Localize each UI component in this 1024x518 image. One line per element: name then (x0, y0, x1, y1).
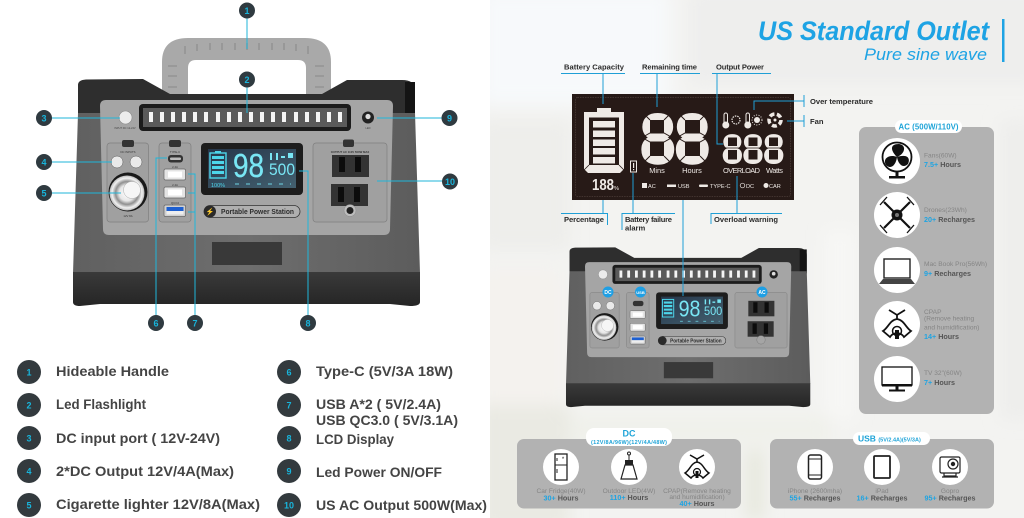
LED flashlight bar (139, 104, 351, 131)
USB pill heading (853, 432, 930, 445)
AC item: fan (874, 138, 961, 184)
DC item: car fridge (536, 449, 586, 502)
AC item: drone: 20+ Recharges (924, 215, 975, 224)
AC item: drone: Drones(23Wh) (924, 207, 967, 214)
DC output module: DC INPUTS (120, 150, 136, 154)
brand badge: ⚡ (206, 207, 214, 216)
power station front view (small) (566, 247, 810, 407)
USB item: GoPro (925, 449, 975, 502)
output mode row: CAR (769, 184, 781, 190)
legend item 10 (277, 493, 487, 517)
number marker 1 (239, 2, 255, 18)
USB item: iPad: 16+ Recharges (857, 494, 907, 502)
remaining time digits: 88 (640, 100, 710, 178)
top black shell (78, 79, 415, 116)
number marker 8 (300, 315, 316, 331)
corner shadow strip (405, 82, 415, 116)
legend item 4: 4 (26, 466, 32, 476)
legend item 7: 7 (286, 400, 292, 410)
title (758, 16, 1004, 64)
legend item 1: 1 (26, 368, 32, 378)
power station front view (large) (73, 38, 420, 306)
LCD display: 100% (211, 183, 225, 189)
number marker 2: 2 (244, 75, 250, 85)
number marker 8: 8 (305, 318, 311, 328)
AC item: laptop: Mac Book Pro(56Wh) (924, 261, 987, 268)
legend item 2: 2 (26, 400, 32, 410)
legend item 6: 6 (286, 368, 292, 378)
power station front view (small): 500 (704, 304, 723, 318)
DC item: CPAP mask (663, 449, 731, 508)
AC item: CPAP mask: 14+ Hours (924, 332, 959, 341)
port badge: AC: AC (758, 290, 766, 296)
legend item 3: 3 (26, 434, 32, 444)
DC pill heading: DC (622, 428, 636, 438)
legend item 2 (17, 393, 146, 417)
number marker 9 (442, 110, 458, 126)
port badge: USB: USB (636, 290, 645, 295)
legend item 5: 5 (26, 500, 32, 510)
USB item: iPhone: 55+ Recharges (790, 494, 840, 502)
legend item 3 (17, 426, 220, 450)
AC pill heading: AC (500W/110V) (898, 122, 959, 132)
legend item 1: Hideable Handle (56, 364, 170, 379)
AC item: CPAP mask: (Remove heating (924, 316, 975, 322)
AC item: laptop: 9+ Recharges (924, 269, 971, 278)
port badge: DC: DC (604, 290, 612, 296)
output mode row: DC (746, 184, 754, 190)
USB module: TYPE-C (170, 150, 180, 154)
number marker 10 (442, 174, 458, 190)
callout: Fan: Fan (810, 117, 824, 126)
USB item: GoPro: Gopro (941, 488, 959, 495)
output power digits: OVERLOAD (723, 166, 760, 175)
callout: Battery failure alarm (625, 215, 672, 232)
LCD diagram (572, 94, 794, 200)
legend item 6: Type-C (5V/3A 18W) (316, 364, 453, 379)
legend item 5 (17, 493, 260, 517)
rear vent (212, 242, 282, 265)
callout: Battery Capacity: Battery Capacity (564, 62, 625, 72)
number marker 7: 7 (192, 318, 198, 328)
DC output module: 12V 8A (123, 214, 133, 218)
legend item 7 (277, 393, 458, 428)
legend item 7: USB QC3.0 ( 5V/3.1A) (316, 413, 458, 428)
callout: Output Power: Output Power (716, 62, 764, 72)
port badge: DC (602, 286, 614, 298)
grey body (73, 113, 420, 273)
AC item: drone (874, 192, 975, 238)
output mode row: TYPE-C (710, 184, 731, 190)
LCD callout lines (561, 74, 804, 230)
number marker 3 (36, 110, 52, 126)
AC outlet module (313, 140, 387, 222)
legend item 4: 2*DC Output 12V/4A(Max) (56, 464, 234, 479)
LCD display (201, 143, 303, 195)
callout: Battery failure alarm: alarm (625, 224, 646, 232)
port badge: AC (756, 286, 768, 298)
AC outlet module: OUTPUT AC 110V 500W MAX (331, 150, 369, 154)
legend item 10: US AC Output 500W(Max) (316, 498, 487, 513)
USB pill heading: USB (5V/2.4A)(5V/3A) (858, 434, 921, 444)
USB item: iPad (857, 449, 907, 502)
bottom black base (73, 272, 420, 306)
battery failure icon (630, 161, 636, 172)
legend item 9: 9 (286, 466, 292, 476)
AC item: fan: Fans(60W) (924, 152, 957, 160)
callout lines (large device) (52, 17, 442, 316)
remaining time digits: Mins (649, 166, 665, 175)
DC output module (107, 140, 148, 222)
AC item: TV (874, 356, 962, 402)
output mode row: USB (678, 184, 690, 190)
callout: Remaining time: Remaining time (642, 62, 697, 72)
legend: feature list (17, 360, 487, 517)
over temperature icons (722, 113, 762, 128)
number marker 6: 6 (153, 318, 159, 328)
callout: Overload warning: Overload warning (714, 215, 778, 224)
USB item: iPhone: iPhone (2600mha) (788, 488, 842, 495)
AC item: CPAP mask (874, 301, 979, 347)
panel: USB devices (770, 432, 994, 508)
panel: AC devices (859, 120, 994, 414)
DC item: outdoor LED: 110+ Hours (610, 493, 648, 502)
number marker 9: 9 (447, 114, 452, 124)
legend item 6 (277, 360, 453, 384)
DC pill heading (586, 428, 672, 446)
LCD display: 98 (233, 147, 264, 184)
USB module: 2.4A (172, 165, 178, 169)
DC item: outdoor LED (603, 449, 655, 502)
power station front view (small): 98 (679, 295, 700, 321)
number marker 4 (36, 154, 52, 170)
legend item 4 (17, 459, 234, 483)
AC item: TV: TV 32"(60W) (924, 370, 962, 377)
remaining time digits: Hours (682, 166, 702, 175)
output power digits: Watts (766, 166, 783, 175)
legend item 10: 10 (284, 500, 294, 510)
legend item 9 (277, 459, 442, 483)
brand badge (204, 206, 300, 218)
AC item: fan: 7.5+ Hours (924, 160, 961, 169)
DC input port: INPUT DC 12-24V (114, 126, 136, 130)
AC item: CPAP mask: CPAP (924, 309, 942, 316)
number marker 7 (187, 315, 203, 331)
legend item 8: LCD Display (316, 432, 394, 447)
DC pill heading: (12V/8A/96W)(12V/4A/48W) (591, 440, 667, 446)
DC input port (114, 111, 136, 130)
background photo: right half (480, 0, 1024, 518)
legend item 7: USB A*2 ( 5V/2.4A) (316, 397, 441, 412)
line from LCD diagram to device (682, 200, 684, 296)
legend item 1 (17, 360, 170, 384)
number marker 5: 5 (41, 188, 47, 198)
output mode row: AC (648, 184, 656, 190)
USB module (159, 140, 191, 222)
front panel (100, 100, 393, 235)
battery gauge (584, 108, 624, 173)
LCD display: 500 (269, 160, 295, 179)
fan icon (769, 114, 781, 126)
number marker 4: 4 (41, 158, 47, 168)
legend item 3: DC input port ( 12V-24V) (56, 431, 220, 446)
AC item: TV: 7+ Hours (924, 378, 955, 387)
DC item: car fridge: 30+ Hours (544, 494, 578, 502)
USB module: 2.4A (172, 183, 178, 187)
legend item 5: Cigarette lighter 12V/8A(Max) (56, 497, 260, 512)
title: Pure sine wave (864, 45, 987, 64)
brand badge: Portable Power Station (221, 207, 294, 216)
callout: Over temperature: Over temperature (810, 97, 873, 106)
number marker 3: 3 (41, 114, 47, 124)
legend item 9: Led Power ON/OFF (316, 465, 442, 480)
DC item: outdoor LED: Outdoor LED(4W) (603, 488, 655, 495)
power station front view (small): Portable Power Station (670, 338, 722, 344)
LED switch: LED (365, 126, 371, 130)
number marker 10: 10 (445, 177, 455, 187)
AC item: laptop (874, 247, 987, 293)
number marker 2 (239, 72, 255, 88)
USB item: iPad: iPad (875, 488, 889, 495)
number marker 1: 1 (244, 6, 250, 16)
USB item: iPhone (788, 449, 842, 502)
AC pill heading (895, 120, 962, 133)
output mode row (642, 183, 781, 190)
USB item: GoPro: 95+ Recharges (925, 494, 975, 502)
legend item 2: Led Flashlight (56, 397, 146, 412)
DC item: car fridge: Car Fridge(40W) (536, 488, 586, 495)
handle (162, 38, 331, 95)
callout: Percentage: Percentage (564, 215, 604, 224)
DC item: CPAP mask: 40+ Hours (680, 499, 714, 508)
port badge: USB (635, 286, 646, 298)
number marker 6 (148, 315, 164, 331)
AC item: CPAP mask: and humidification) (924, 324, 979, 332)
output power digits: 888 (722, 126, 784, 172)
DC item: CPAP mask: and humidification) (669, 494, 725, 501)
LED switch (362, 112, 374, 130)
callout: Battery failure alarm: Battery failure (625, 215, 672, 224)
percentage readout: 188 (592, 177, 614, 194)
panel: DC devices (517, 428, 741, 508)
percent sign: % (614, 186, 619, 192)
DC item: CPAP mask: CPAP(Remove heating (663, 488, 731, 495)
title: US Standard Outlet (758, 16, 990, 46)
USB module: QC3.0 (171, 201, 179, 205)
legend item 8: 8 (286, 434, 292, 444)
number marker 5 (36, 185, 52, 201)
legend item 8 (277, 426, 394, 450)
DC item: car fridge: * (562, 457, 565, 463)
